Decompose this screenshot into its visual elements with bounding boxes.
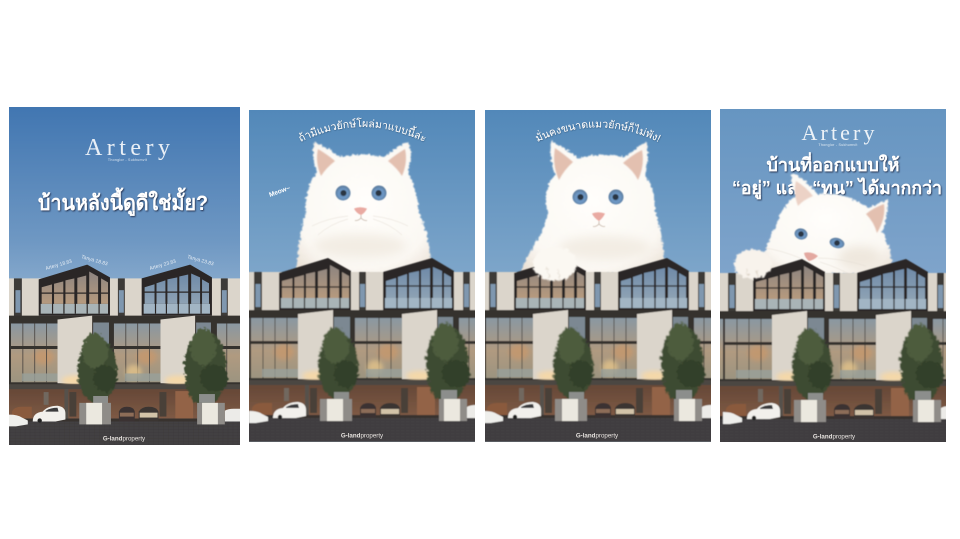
building — [240, 258, 485, 442]
logo: Artery: Thonglor - Sukhumvit — [108, 158, 147, 162]
panel: intro house poster — [0, 107, 243, 445]
heading: บ้านหลังนี้ดูดีใช่มั้ย? — [38, 187, 208, 217]
sky background — [249, 110, 475, 442]
building — [714, 259, 959, 443]
building — [0, 265, 243, 445]
sky background — [9, 107, 240, 278]
roof captions: Artery 18.83 — [45, 259, 73, 272]
heading: บ้านที่ออกแบบให้ — [766, 152, 900, 175]
logo: Artery: Artery — [85, 135, 170, 161]
building — [475, 258, 720, 442]
panel: giant cat appears — [249, 110, 475, 442]
curved caption: ถ้ามีแมวยักษ์โผล่มาแบบนี้ล่ะ — [298, 118, 426, 142]
brand logo: G-landproperty — [341, 432, 384, 440]
cat — [296, 142, 433, 274]
icon: cat paw — [533, 247, 577, 281]
roof captions: Tanya 23.83 — [186, 254, 215, 267]
logo: Artery: Thonglor - Sukhumvit — [818, 143, 858, 147]
heading — [732, 152, 942, 200]
meow label: Meow~ — [268, 185, 291, 199]
roof captions — [46, 254, 214, 270]
cat — [758, 173, 893, 280]
panel: cat paw on roof — [485, 110, 711, 442]
roof captions: Artery 23.83 — [149, 259, 177, 272]
sky background — [720, 109, 946, 274]
brand logo: G-landproperty — [576, 432, 619, 440]
curved caption: มั่นคงขนาดแมวยักษ์ก็ไม่พัง! — [536, 120, 662, 142]
icon: cat paw — [734, 249, 772, 279]
cat — [520, 141, 665, 274]
brand logo: G-landproperty — [103, 436, 146, 442]
heading: “อยู่” และ “ทน” ได้มากกว่า — [732, 177, 942, 200]
logo: Artery: Artery — [802, 120, 874, 145]
brand logo: G-landproperty — [813, 434, 856, 440]
panel: cat on roof with closing message — [714, 109, 959, 443]
sky background — [485, 110, 711, 442]
roof captions: Tanya 18.83 — [80, 254, 109, 267]
